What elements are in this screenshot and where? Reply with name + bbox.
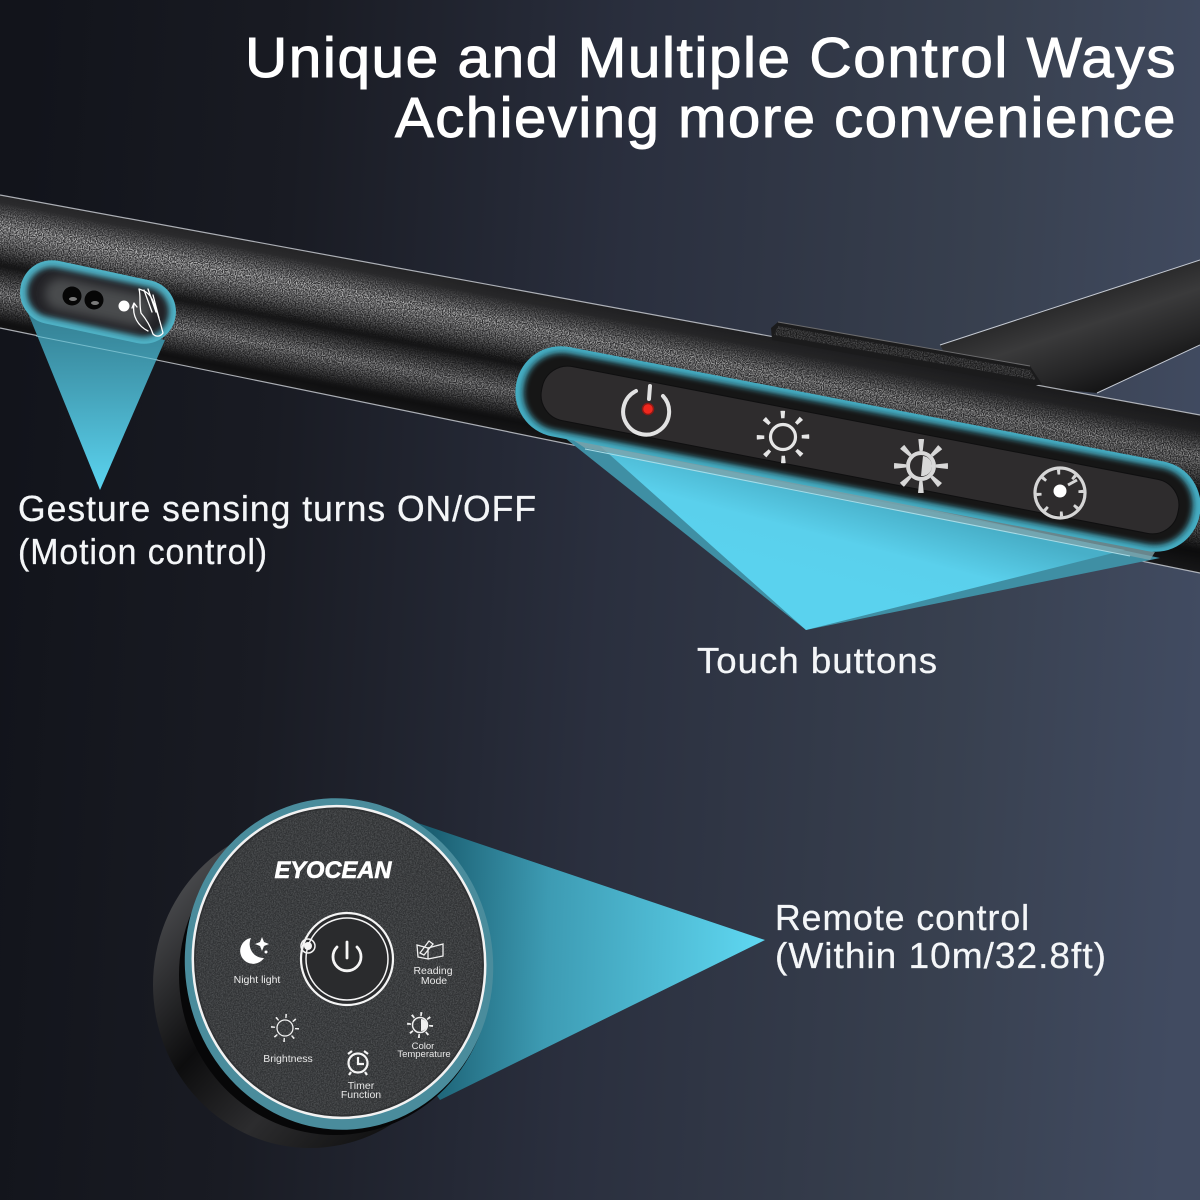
sensor pill: dark inner glow — [22, 263, 174, 341]
gesture sensor highlight — [14, 254, 182, 350]
icon: night light — [240, 937, 269, 964]
mounting bracket — [771, 322, 1042, 386]
brand logo: EYOCEAN — [274, 857, 392, 884]
sensor pill: grey centre — [42, 275, 154, 329]
label: night light: Night light — [234, 974, 280, 986]
title — [245, 26, 1177, 150]
callout label: remote control — [775, 897, 1107, 976]
callout beam: gesture — [28, 313, 165, 490]
callout label: remote control: (Within 10m/32.8ft) — [775, 935, 1107, 976]
remote face: teal rim — [163, 778, 515, 1150]
sensor lens right — [84, 290, 104, 310]
touch panel: button strip — [537, 362, 1183, 538]
callout beam: remote control — [340, 818, 765, 1100]
label: brightness: Brightness — [263, 1053, 313, 1065]
label: reading mode: Reading — [413, 965, 453, 977]
sensor pill: teal frame — [14, 254, 182, 350]
label: colour temperature: Temperature — [397, 1049, 451, 1060]
label: timer function — [341, 1080, 381, 1101]
lamp arm — [940, 260, 1200, 393]
title: Unique and Multiple Control Ways — [245, 26, 1177, 90]
callout label: remote control: Remote control — [775, 897, 1030, 938]
remote face: panel — [173, 787, 505, 1137]
touch buttons highlight — [508, 339, 1200, 559]
label: colour temperature: Color — [412, 1041, 434, 1052]
icon: brightness — [273, 1016, 297, 1040]
icon: colour temperature — [898, 443, 944, 489]
lamp bar — [0, 190, 1200, 580]
label: timer function: Function — [341, 1089, 381, 1101]
icon: waving hand — [132, 289, 163, 336]
icon: reading mode — [417, 941, 443, 959]
icon: timer dial — [1035, 468, 1085, 518]
sensor lens left — [62, 286, 82, 306]
indicator dot — [118, 300, 130, 312]
callout label: gesture sensing: Gesture sensing turns ON/OFF — [18, 488, 537, 529]
label: timer function: Timer — [348, 1080, 375, 1092]
bar edge highlights — [0, 195, 1200, 573]
label: colour temperature — [397, 1041, 451, 1060]
icon: power button with red LED — [623, 386, 669, 435]
power ring button — [301, 913, 393, 1005]
touch panel: dark inner glow — [517, 346, 1199, 552]
callout label: gesture sensing: (Motion control) — [18, 531, 268, 572]
remote face: grain — [176, 791, 502, 1133]
callout beam: touch buttons — [555, 430, 1160, 630]
icon: colour temperature — [409, 1014, 431, 1036]
label: reading mode: Mode — [421, 975, 447, 987]
callout label: touch buttons: Touch buttons — [697, 640, 938, 681]
remote body — [153, 815, 491, 1148]
callout label: gesture sensing — [18, 488, 537, 572]
remote control — [153, 778, 515, 1150]
touch panel: teal glow frame — [508, 339, 1200, 559]
title: Achieving more convenience — [395, 86, 1177, 150]
label: reading mode — [413, 965, 453, 987]
icon: timer alarm clock — [348, 1051, 368, 1075]
icon: brightness sun — [758, 412, 808, 462]
